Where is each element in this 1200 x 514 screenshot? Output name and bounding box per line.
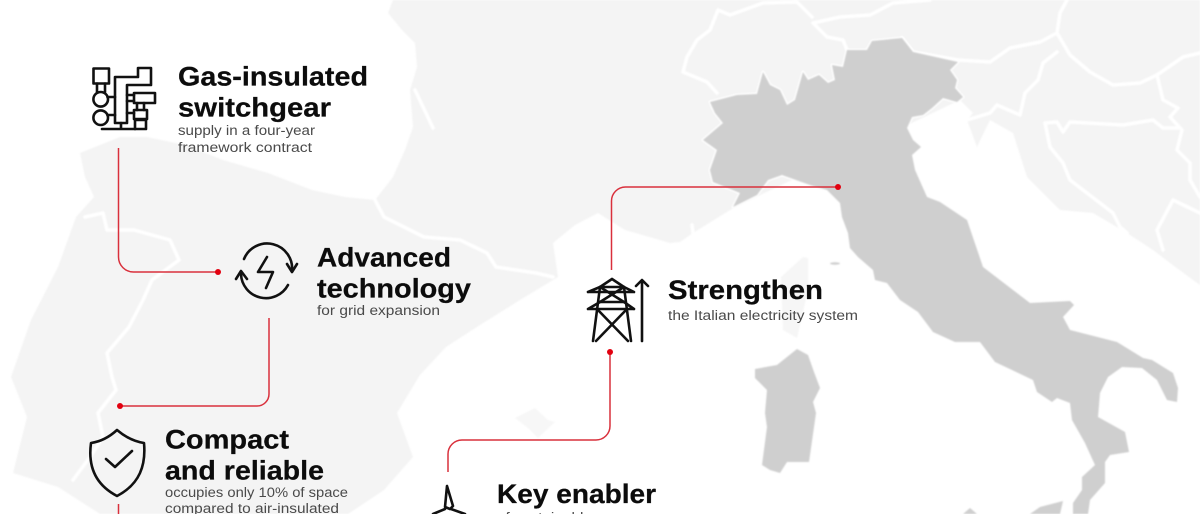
icon: advanced technology cycle with lightning <box>236 243 297 298</box>
connector: key enabler to strengthen <box>448 349 613 472</box>
heading block: gas-insulated switchgear: supply in a four-year <box>178 123 316 138</box>
map: Sicily <box>963 501 1063 514</box>
heading block: strengthen: the Italian electricity system <box>668 308 858 323</box>
heading block: strengthen: Strengthen <box>668 275 823 305</box>
heading block: gas-insulated switchgear: framework contract <box>178 140 312 155</box>
heading block: key enabler: Key enabler <box>497 479 657 509</box>
heading block: compact and reliable: Compact <box>165 424 289 454</box>
connector: strengthen to Italy <box>612 184 841 270</box>
heading block: advanced technology <box>317 242 471 318</box>
icon: gas-insulated switchgear <box>93 68 155 129</box>
connector: advanced technology to compact <box>117 318 269 409</box>
heading block: gas-insulated switchgear: Gas-insulated <box>178 62 368 92</box>
heading block: gas-insulated switchgear <box>178 62 368 155</box>
heading block: gas-insulated switchgear: switchgear <box>178 92 332 122</box>
connector: switchgear to advanced technology <box>118 148 221 275</box>
heading block: strengthen <box>668 275 858 323</box>
heading block: compact and reliable: and reliable <box>165 456 324 486</box>
heading block: compact and reliable <box>165 424 348 514</box>
icon: shield with check <box>90 430 144 496</box>
connector: compact downward <box>118 504 120 514</box>
icon: wind turbine <box>433 486 465 514</box>
map: Corsica <box>781 257 808 338</box>
map: Sardinia <box>755 349 820 473</box>
map: Balearic islands <box>515 408 555 438</box>
heading block: advanced technology: technology <box>317 274 471 304</box>
heading block: advanced technology: for grid expansion <box>317 303 440 318</box>
heading block: advanced technology: Advanced <box>317 242 451 272</box>
map: Elba <box>830 262 840 265</box>
map: Italy highlighted <box>703 38 1178 514</box>
heading block: compact and reliable: occupies only 10% of space <box>165 485 348 500</box>
icon: transmission tower with arrow <box>588 279 648 341</box>
